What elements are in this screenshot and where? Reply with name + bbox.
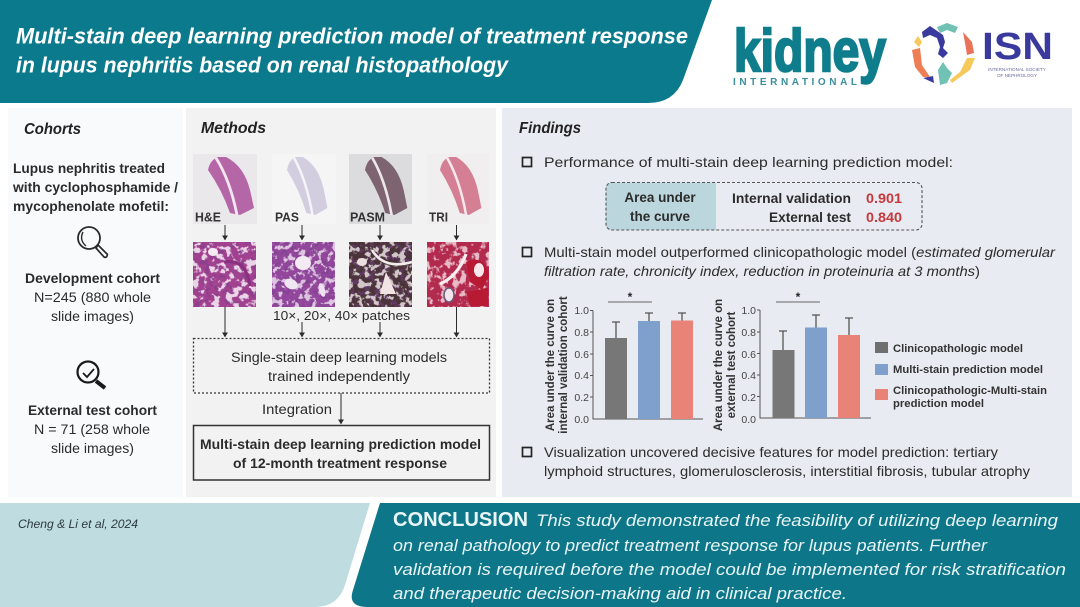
multi-stain model box: of 12-month treatment response <box>233 456 447 471</box>
cohorts heading: Cohorts <box>24 121 81 138</box>
development cohort text <box>25 271 161 324</box>
finding 3 <box>522 444 1030 479</box>
bar chart: internal validation: internal validation cohort <box>558 296 570 434</box>
AUC callout: 0.840 <box>866 210 902 225</box>
chart legend: prediction model <box>893 398 984 410</box>
cohorts intro text: Lupus nephritis treated <box>13 161 165 176</box>
AUC callout: Internal validation <box>732 191 851 206</box>
external test cohort text: slide images) <box>51 441 134 456</box>
bar chart: internal validation: 0.6 <box>574 349 589 361</box>
methods heading: Methods <box>201 120 266 137</box>
panel: cohorts <box>8 108 183 497</box>
panel: methods <box>186 108 496 497</box>
bar chart: external test: 0.4 <box>741 370 756 382</box>
single-stain models box: Single-stain deep learning models <box>231 350 447 365</box>
title: in lupus nephritis based on renal histopathology <box>16 52 510 78</box>
slide: TRI <box>427 154 489 224</box>
conclusion text: validation is required before the model could be implemented for risk stratification <box>393 561 1066 579</box>
arrows: slides to patches <box>225 225 456 240</box>
bar chart: internal validation <box>545 290 703 434</box>
slide: PASM <box>349 154 412 224</box>
findings heading: Findings <box>519 120 581 137</box>
logo: ISN: OF NEPHROLOGY <box>997 73 1037 78</box>
bar chart: external test: 0.6 <box>741 349 756 361</box>
slide: H&E: H&E <box>195 210 221 224</box>
bar chart: external test <box>713 290 871 431</box>
cohorts intro text: mycophenolate mofetil: <box>13 199 169 214</box>
single-stain models box <box>194 338 490 393</box>
bar chart: external test: 0.0 <box>741 414 756 426</box>
logo: ISN: ISN <box>982 26 1053 68</box>
integration arrow: Integration <box>262 402 332 417</box>
external test cohort text: N = 71 (258 whole <box>34 422 150 437</box>
patch: H&E <box>193 242 256 307</box>
multi-stain model box: Multi-stain deep learning prediction model <box>200 437 481 452</box>
citation band <box>0 503 370 607</box>
bar chart: external test: 0.8 <box>741 327 756 339</box>
logo: kidney international: kidney <box>734 18 886 84</box>
panel: findings <box>502 108 1072 497</box>
development cohort text: Development cohort <box>25 271 161 286</box>
icon: magnifier <box>78 227 107 257</box>
external test cohort text: External test cohort <box>28 403 158 418</box>
conclusion text: This study demonstrated the feasibility of utilizing deep learning <box>536 512 1059 530</box>
development cohort text: N=245 (880 whole <box>34 290 151 305</box>
finding 2: filtration rate, chronicity index, reduction in proteinuria at 3 months ) <box>544 263 980 279</box>
slide: PAS: PAS <box>275 210 299 224</box>
chart legend: Clinicopathologic model <box>893 343 1023 355</box>
bar chart: internal validation: 1.0 <box>574 305 589 317</box>
title banner <box>0 0 712 103</box>
conclusion text <box>393 508 1066 603</box>
AUC callout: 0.901 <box>866 191 903 206</box>
slide: PASM: PASM <box>350 210 385 224</box>
chart legend: Clinicopathologic-Multi-stain <box>893 385 1047 397</box>
cohorts intro text <box>12 161 178 214</box>
bar chart: external test: external test cohort <box>726 311 738 418</box>
finding 3: Visualization uncovered decisive features for model prediction: tertiary <box>544 444 998 460</box>
bar chart: external test: * <box>796 290 801 304</box>
title: Multi-stain deep learning prediction model of treatment response <box>16 24 688 48</box>
bar chart: internal validation: 0.4 <box>574 370 589 382</box>
AUC callout: Area under <box>624 190 696 205</box>
bar chart: internal validation: * <box>628 290 633 304</box>
finding 2 <box>522 244 1056 279</box>
logo: kidney international: INTERNATIONAL <box>733 77 857 88</box>
conclusion text: and therapeutic decision-making aid in clinical practice. <box>393 585 847 603</box>
finding 1: Performance of multi-stain deep learning prediction model: <box>544 154 953 170</box>
title <box>16 24 688 78</box>
AUC callout: External test <box>769 210 851 225</box>
AUC callout: the curve <box>630 209 691 224</box>
integration arrow <box>262 393 341 424</box>
arrows: patches to single-stain box <box>225 307 456 337</box>
AUC callout <box>606 182 922 230</box>
patch: TRI <box>427 242 489 307</box>
slide: TRI: TRI <box>429 210 448 224</box>
citation band: Cheng & Li et al, 2024 <box>18 519 138 531</box>
patches label: 10×, 20×, 40× patches <box>273 308 411 323</box>
logo: ISN <box>912 23 1053 85</box>
conclusion text: on renal pathology to predict treatment response for lupus patients. Further <box>393 537 989 555</box>
logo: ISN: INTERNATIONAL SOCIETY <box>988 67 1046 72</box>
finding 2: Multi-stain model outperformed clinicopathologic model ( estimated glomerular <box>544 244 1056 260</box>
bar chart: internal validation: Area under the curve on <box>545 299 557 431</box>
icon: magnifier with check <box>78 362 105 388</box>
patch: PASM <box>349 242 412 307</box>
patch: PAS <box>272 242 335 307</box>
bar chart: external test: Area under the curve on <box>713 299 725 431</box>
chart legend <box>875 342 1047 410</box>
bar chart: internal validation: 0.2 <box>574 392 589 404</box>
bar chart: external test: 1.0 <box>741 305 756 317</box>
chart legend: Multi-stain prediction model <box>893 364 1043 376</box>
conclusion text: CONCLUSION <box>393 508 528 531</box>
slide: H&E <box>193 154 257 224</box>
cohorts intro text: with cyclophosphamide / <box>12 180 178 195</box>
bar chart: internal validation: 0.8 <box>574 327 589 339</box>
conclusion panel <box>352 503 1080 607</box>
external test cohort text <box>28 403 158 456</box>
bar chart: external test: 0.2 <box>741 392 756 404</box>
bar chart: internal validation: 0.0 <box>574 414 589 426</box>
finding 3: lymphoid structures, glomerulosclerosis, interstitial fibrosis, tubular atrophy <box>544 463 1030 479</box>
slide: PAS <box>272 154 336 224</box>
single-stain models box: trained independently <box>268 369 410 384</box>
multi-stain model box <box>194 426 490 480</box>
development cohort text: slide images) <box>51 309 134 324</box>
